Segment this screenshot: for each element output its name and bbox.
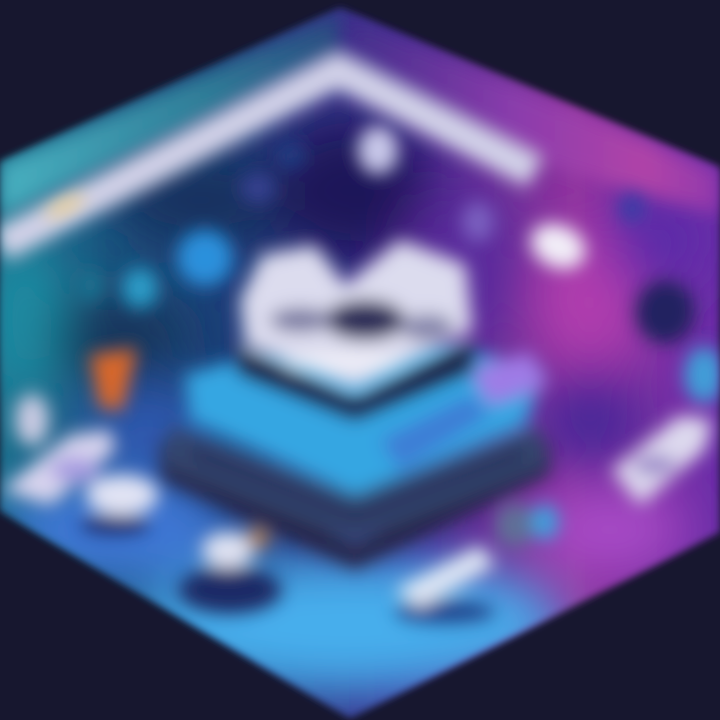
right device cluster (612, 347, 720, 505)
bottom-left device (178, 526, 282, 614)
floating tiles (76, 126, 695, 344)
white roof band (0, 70, 535, 245)
bottom-right device (395, 503, 559, 624)
left device cluster (2, 394, 158, 535)
base platform (160, 340, 550, 570)
central cube (235, 240, 475, 418)
orange pin (90, 348, 137, 410)
top edge tint (0, 14, 340, 215)
